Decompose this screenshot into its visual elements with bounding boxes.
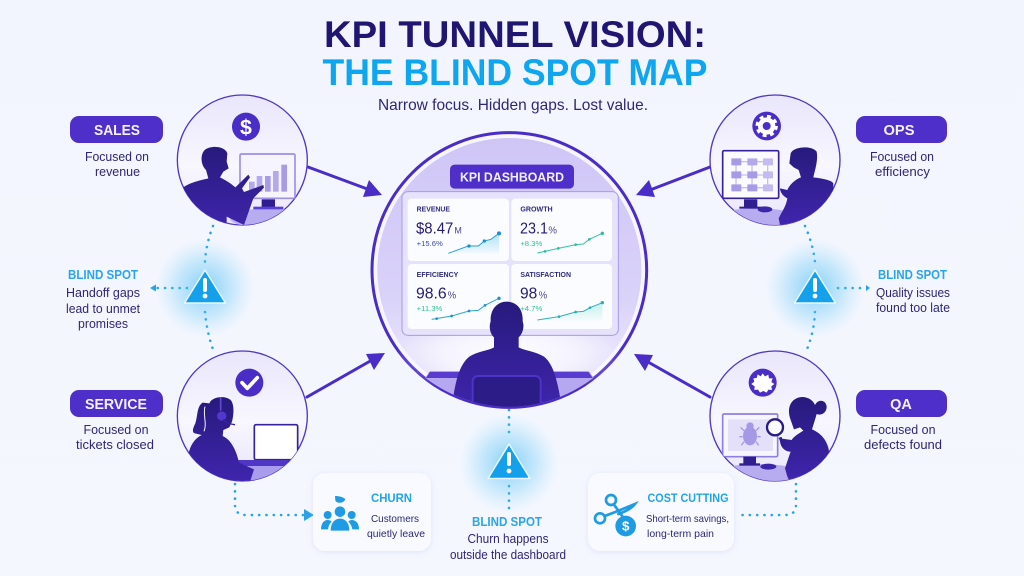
card: growth: 23.1: [520, 220, 548, 237]
icon: warning triangle right: [765, 238, 865, 338]
dashboard board: [402, 192, 618, 335]
panel: central KPI dashboard circle: [372, 133, 647, 413]
label: qa: [856, 390, 947, 452]
callout: blind spot right: BLIND SPOT: [878, 268, 947, 282]
arrow: ops to dashboard: [636, 167, 710, 197]
callout: blind spot bottom: [450, 515, 566, 562]
label: service: SERVICE: [85, 397, 147, 413]
card: cost cutting: long-term pain: [647, 528, 714, 540]
label: service: tickets closed: [76, 437, 154, 452]
label: qa: defects found: [864, 437, 942, 452]
card: churn: quietly leave: [367, 528, 425, 540]
icon: warning triangle bottom: [459, 413, 559, 513]
card: efficiency: 98.6: [416, 286, 447, 303]
icon: check badge: [235, 369, 263, 397]
card: satisfaction: %: [539, 291, 548, 302]
arrows into the dashboard: [307, 167, 710, 397]
icon: gear badge: [752, 112, 781, 140]
panel: ops illustration circle: [710, 95, 840, 228]
icon: scissors and coin: [595, 495, 636, 536]
card: revenue: REVENUE: [417, 205, 450, 214]
card: efficiency: +11.3%: [417, 304, 442, 313]
card: satisfaction: [511, 264, 612, 329]
panel: sales illustration circle: [177, 95, 310, 230]
dashboard pill: [450, 165, 574, 189]
icon: bug: [739, 422, 761, 445]
card: cost cutting: COST CUTTING: [648, 493, 729, 505]
subtitle: Narrow focus. Hidden gaps. Lost value.: [378, 97, 648, 114]
icon: scissors and coin: $: [622, 519, 630, 534]
callout: blind spot right: Quality issues: [876, 285, 950, 300]
label: ops: efficiency: [875, 164, 931, 179]
callout: blind spot right: found too late: [876, 300, 950, 315]
callout: blind spot left: [66, 268, 140, 331]
label: service: [70, 390, 163, 452]
card: satisfaction: +4.7%: [520, 304, 542, 313]
label: sales: [70, 116, 163, 179]
card: growth: +8.3%: [520, 239, 542, 248]
arrow: qa to dashboard: [634, 354, 710, 397]
card: efficiency: [408, 264, 509, 329]
callout: blind spot left: promises: [78, 316, 128, 331]
card: growth: [511, 199, 612, 261]
card: churn: [313, 473, 431, 551]
callout: blind spot bottom: Churn happens: [468, 531, 548, 546]
card: revenue: +15.6%: [417, 239, 443, 248]
title: THE BLIND SPOT MAP: [322, 52, 708, 93]
card: efficiency: %: [448, 291, 457, 302]
title: [322, 14, 708, 93]
label: service: Focused on: [84, 422, 148, 437]
label: ops: OPS: [884, 123, 915, 139]
title: KPI TUNNEL VISION:: [324, 14, 706, 55]
callout: blind spot left: Handoff gaps: [66, 285, 140, 300]
card: churn: CHURN: [371, 493, 412, 505]
card: efficiency: EFFICIENCY: [417, 270, 458, 279]
label: ops: Focused on: [870, 149, 934, 164]
arrow: sales to dashboard: [308, 167, 382, 197]
person viewing the dashboard: [425, 302, 594, 413]
card: revenue: $8.47: [416, 220, 453, 237]
label: sales: revenue: [95, 164, 140, 179]
dotted arrowheads: [150, 284, 870, 521]
arrow: service to dashboard: [307, 353, 385, 397]
callout: blind spot right: [876, 268, 950, 315]
callout: blind spot left: BLIND SPOT: [68, 268, 138, 282]
icon: defect badge: [749, 369, 777, 397]
callout: blind spot left: lead to unmet: [66, 301, 140, 316]
card: satisfaction: SATISFACTION: [520, 270, 571, 279]
card: growth: %: [548, 225, 557, 236]
card: revenue: [408, 199, 509, 261]
panel: service illustration circle: [177, 351, 307, 482]
card: growth: GROWTH: [520, 205, 553, 214]
dotted connectors: [157, 226, 866, 515]
panel: qa illustration circle: [710, 351, 840, 483]
label: sales: Focused on: [85, 149, 149, 164]
card: satisfaction: 98: [520, 286, 537, 303]
icon: customers group: [321, 496, 359, 531]
icon: dollar badge: $: [240, 115, 252, 139]
card: cost cutting: [588, 473, 734, 551]
card: churn: Customers: [371, 513, 419, 525]
dashboard pill: KPI DASHBOARD: [460, 169, 564, 184]
icon: warning triangle left: [155, 238, 255, 338]
label: qa: QA: [890, 397, 912, 413]
callout: blind spot bottom: outside the dashboard: [450, 547, 566, 562]
label: qa: Focused on: [870, 422, 936, 437]
label: ops: [856, 116, 947, 179]
label: sales: SALES: [94, 123, 140, 139]
card: revenue: M: [454, 225, 462, 235]
card: cost cutting: Short-term savings,: [646, 513, 729, 525]
callout: blind spot bottom: BLIND SPOT: [472, 515, 542, 529]
